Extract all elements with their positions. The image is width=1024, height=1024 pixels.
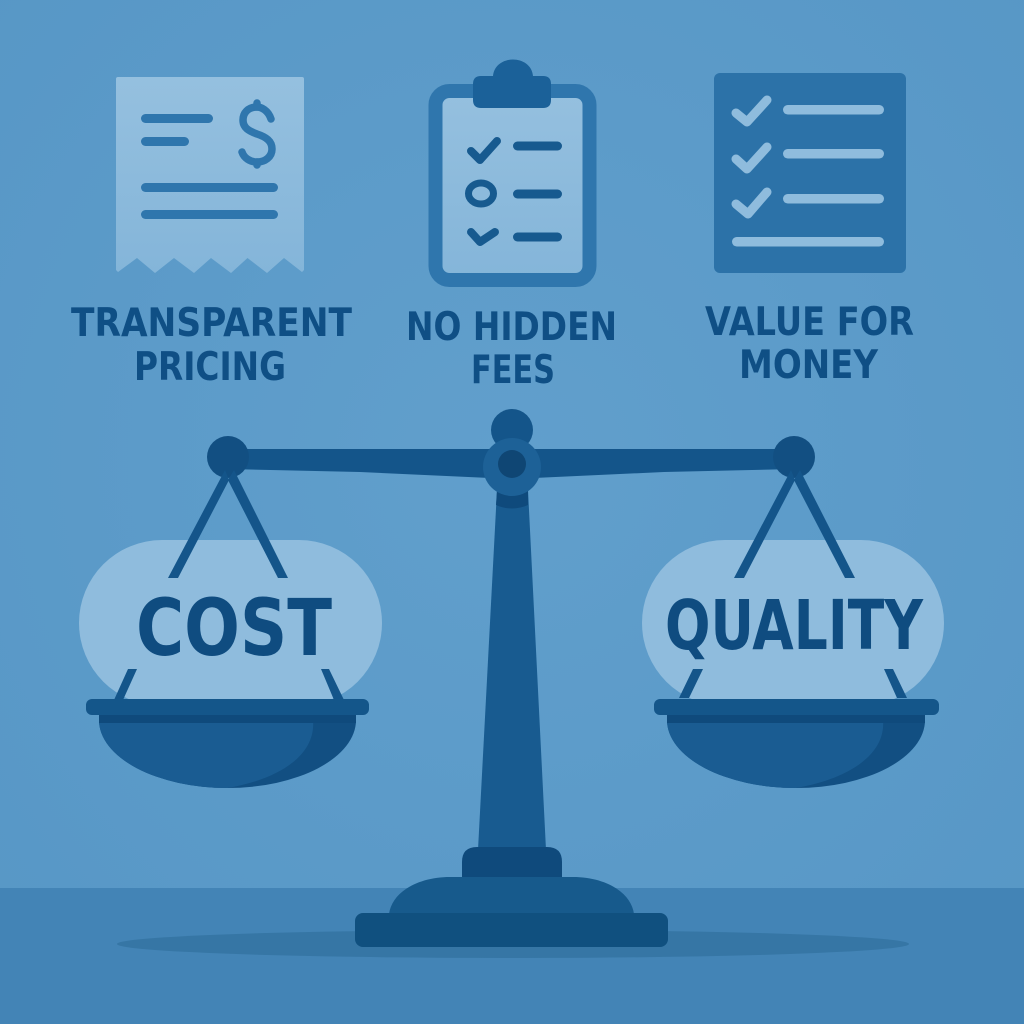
- icon: dollar sign: [242, 103, 272, 165]
- left pan: cost: [79, 470, 382, 788]
- pan bowl: [99, 720, 356, 788]
- balance scale stand: [355, 490, 668, 947]
- label: transparent pricing: TRANSPARENT: [71, 301, 352, 346]
- bubble: [79, 540, 382, 706]
- label: transparent pricing: [71, 301, 352, 390]
- word: cost: COST: [136, 584, 332, 674]
- bubble: [642, 540, 944, 706]
- label: no hidden fees: NO HIDDEN: [406, 305, 617, 350]
- label: value for money: VALUE FOR: [705, 300, 914, 345]
- icon: clipboard: [436, 60, 590, 280]
- label: value for money: MONEY: [739, 343, 879, 388]
- label: transparent pricing: PRICING: [134, 345, 286, 390]
- icon: value checklist: [714, 73, 906, 273]
- ground shadow: [117, 930, 909, 958]
- pan bowl: [667, 720, 925, 788]
- word: quality: QUALITY: [665, 586, 924, 666]
- label: no hidden fees: [406, 305, 617, 393]
- label: value for money: [705, 300, 914, 388]
- icon: receipt: [116, 77, 304, 273]
- label: no hidden fees: FEES: [471, 348, 555, 393]
- right pan: quality: [642, 470, 944, 788]
- scale beam: [207, 409, 815, 496]
